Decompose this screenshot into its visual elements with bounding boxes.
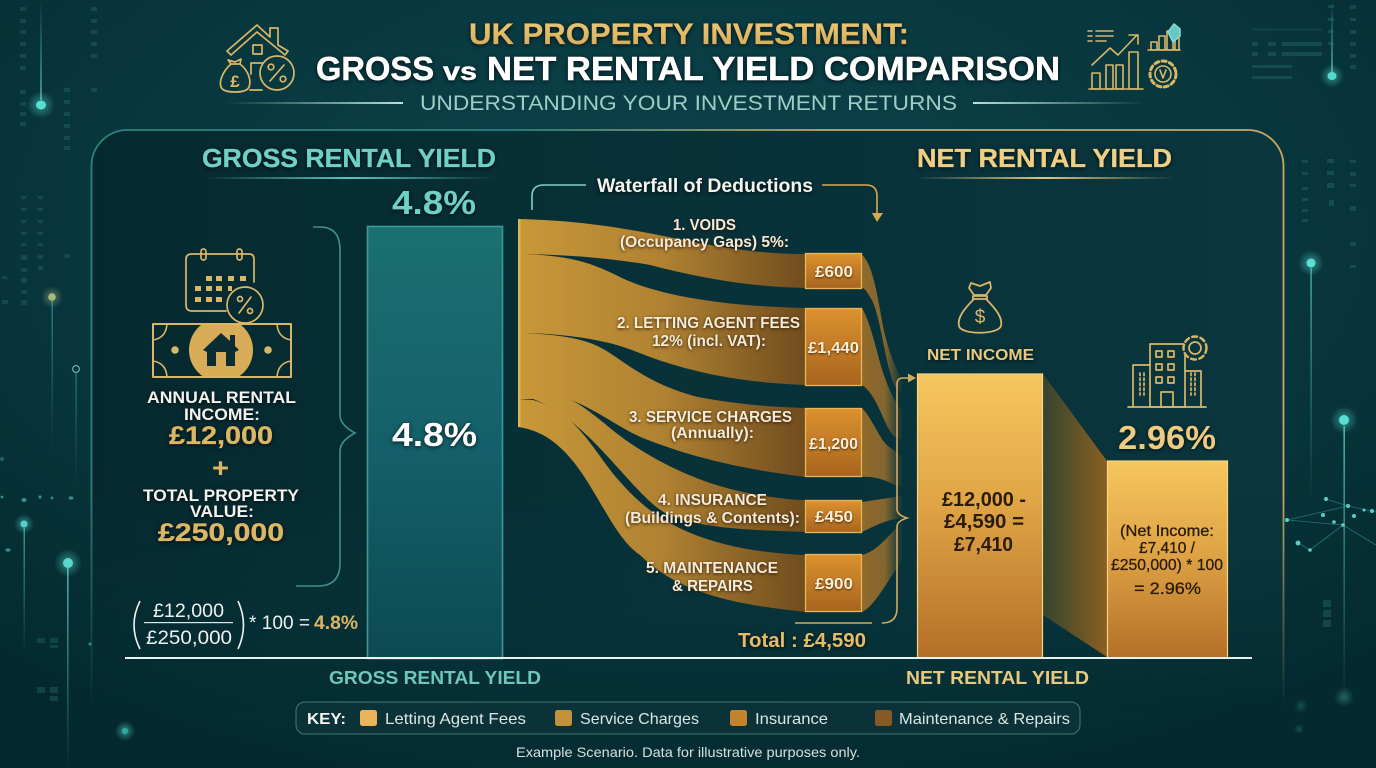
legend item: insurance: [730, 710, 828, 728]
box: service charges: [806, 408, 862, 476]
legend item: insurance: Insurance: [755, 711, 828, 728]
icon: house, money bag and percent: £: [230, 72, 240, 91]
text: annual rental income: £12,000: [169, 422, 273, 450]
box: service charges: £1,200: [809, 436, 858, 453]
text: total property value: £250,000: [158, 519, 284, 547]
bar: net income: [918, 374, 1042, 658]
label: voids: (Occupancy Gaps) 5%:: [620, 234, 789, 251]
icon: building with gear: [1128, 336, 1206, 407]
box: voids: £600: [815, 264, 853, 281]
label: insurance: 4. INSURANCE: [658, 492, 767, 509]
legend: [296, 702, 1080, 734]
footer note: Example Scenario. Data for illustrative purposes only.: [516, 744, 860, 760]
flow: insurance: [518, 387, 806, 532]
flow: letting agent fees: [518, 254, 806, 385]
axis label: net: NET RENTAL YIELD: [906, 667, 1089, 688]
total deductions: Total : £4,590: [738, 630, 866, 652]
legend: KEY:: [307, 711, 346, 728]
plus sign: +: [212, 453, 229, 483]
icon: growth chart and gears: [1088, 24, 1180, 89]
baseline axis: [125, 657, 1252, 659]
text: total property value: TOTAL PROPERTY: [143, 487, 299, 505]
bar: net income: £12,000 -: [942, 489, 1026, 511]
waterfall: deduction flows: [518, 219, 806, 612]
bar: net rental yield: = 2.96%: [1134, 579, 1201, 598]
bar: net rental yield: £7,410 /: [1139, 540, 1196, 557]
box: letting agent fees: £1,440: [808, 340, 859, 357]
connector between net bars: [1043, 374, 1107, 657]
formula: gross yield: 4.8%: [314, 613, 358, 634]
label: insurance: (Buildings & Contents):: [625, 510, 800, 527]
label: service charges: (Annually):: [671, 425, 754, 442]
box: voids: [806, 254, 862, 288]
title line 2: NET RENTAL YIELD COMPARISON: [487, 50, 1060, 87]
formula: gross yield: £250,000: [146, 628, 232, 649]
text: annual rental income: INCOME:: [184, 406, 260, 424]
flow: maintenance: [518, 399, 806, 612]
label: maintenance: 5. MAINTENANCE: [646, 560, 778, 577]
formula: gross yield: £12,000: [153, 601, 224, 622]
bar: gross rental yield: 4.8%: [392, 416, 477, 453]
bar: net income: £7,410: [954, 534, 1013, 556]
heading: gross rental yield: GROSS RENTAL YIELD: [202, 145, 496, 173]
box: maintenance: [806, 554, 862, 612]
box: letting agent fees: [806, 308, 862, 386]
icon: house, money bag and percent: [220, 25, 294, 92]
label: letting agent fees: [617, 315, 800, 350]
label: net income: NET INCOME: [927, 347, 1034, 364]
value: net yield above bar: 2.96%: [1118, 419, 1216, 456]
label: voids: [620, 217, 789, 251]
title line 1: UK PROPERTY INVESTMENT:: [469, 18, 909, 51]
bar: net rental yield: (Net Income:: [1120, 523, 1214, 540]
flow: voids: [518, 219, 806, 288]
text: total property value: VALUE:: [190, 503, 254, 521]
label: letting agent fees: 12% (incl. VAT):: [652, 333, 766, 350]
flow: service charges: [518, 333, 806, 477]
label: maintenance: [646, 560, 778, 595]
box: maintenance: £900: [815, 576, 853, 593]
bar: gross rental yield: [368, 226, 502, 658]
box: insurance: [806, 500, 862, 532]
legend item: letting agent fees: Letting Agent Fees: [385, 711, 526, 728]
heading: net rental yield: NET RENTAL YIELD: [917, 145, 1172, 173]
text: annual rental income: ANNUAL RENTAL: [147, 389, 296, 407]
box: insurance: £450: [815, 509, 853, 526]
label: insurance: [625, 492, 800, 527]
icon: money bag: $: [975, 307, 986, 328]
icon: calendar with percent over banknote with house: [153, 249, 291, 382]
value: gross yield above bar: 4.8%: [392, 184, 476, 221]
waterfall heading with bracket arrows: Waterfall of Deductions: [597, 176, 813, 197]
label: maintenance: & REPAIRS: [672, 578, 753, 595]
waterfall heading with bracket arrows: [532, 176, 883, 222]
panel: main container: [90, 129, 1284, 700]
legend item: maintenance and repairs: Maintenance & Repairs: [899, 711, 1070, 728]
axis label: gross: GROSS RENTAL YIELD: [329, 667, 541, 688]
bar: net rental yield: £250,000) * 100: [1111, 557, 1223, 574]
title line 2: vs: [443, 58, 477, 86]
label: service charges: [629, 409, 792, 442]
brace: total deductions to net income: [795, 374, 916, 623]
title block: [225, 18, 1145, 115]
legend item: service charges: Service Charges: [580, 711, 699, 728]
subtitle: UNDERSTANDING YOUR INVESTMENT RETURNS: [420, 91, 957, 115]
formula: gross yield: * 100 =: [249, 613, 310, 634]
text: total property value: [143, 487, 299, 547]
icon: money bag: [959, 282, 1001, 333]
label: voids: 1. VOIDS: [673, 217, 736, 234]
label: letting agent fees: 2. LETTING AGENT FEES: [617, 315, 800, 332]
waterfall: flows converging to net income: [862, 255, 902, 612]
curly brace: gross inputs: [296, 227, 355, 586]
text: annual rental income: [147, 389, 296, 450]
formula: gross yield: [134, 601, 358, 649]
bar: net rental yield: [1108, 461, 1228, 658]
label: service charges: 3. SERVICE CHARGES: [629, 409, 792, 426]
title line 2: GROSS: [316, 50, 434, 87]
bar: net income: £4,590 =: [944, 511, 1024, 533]
